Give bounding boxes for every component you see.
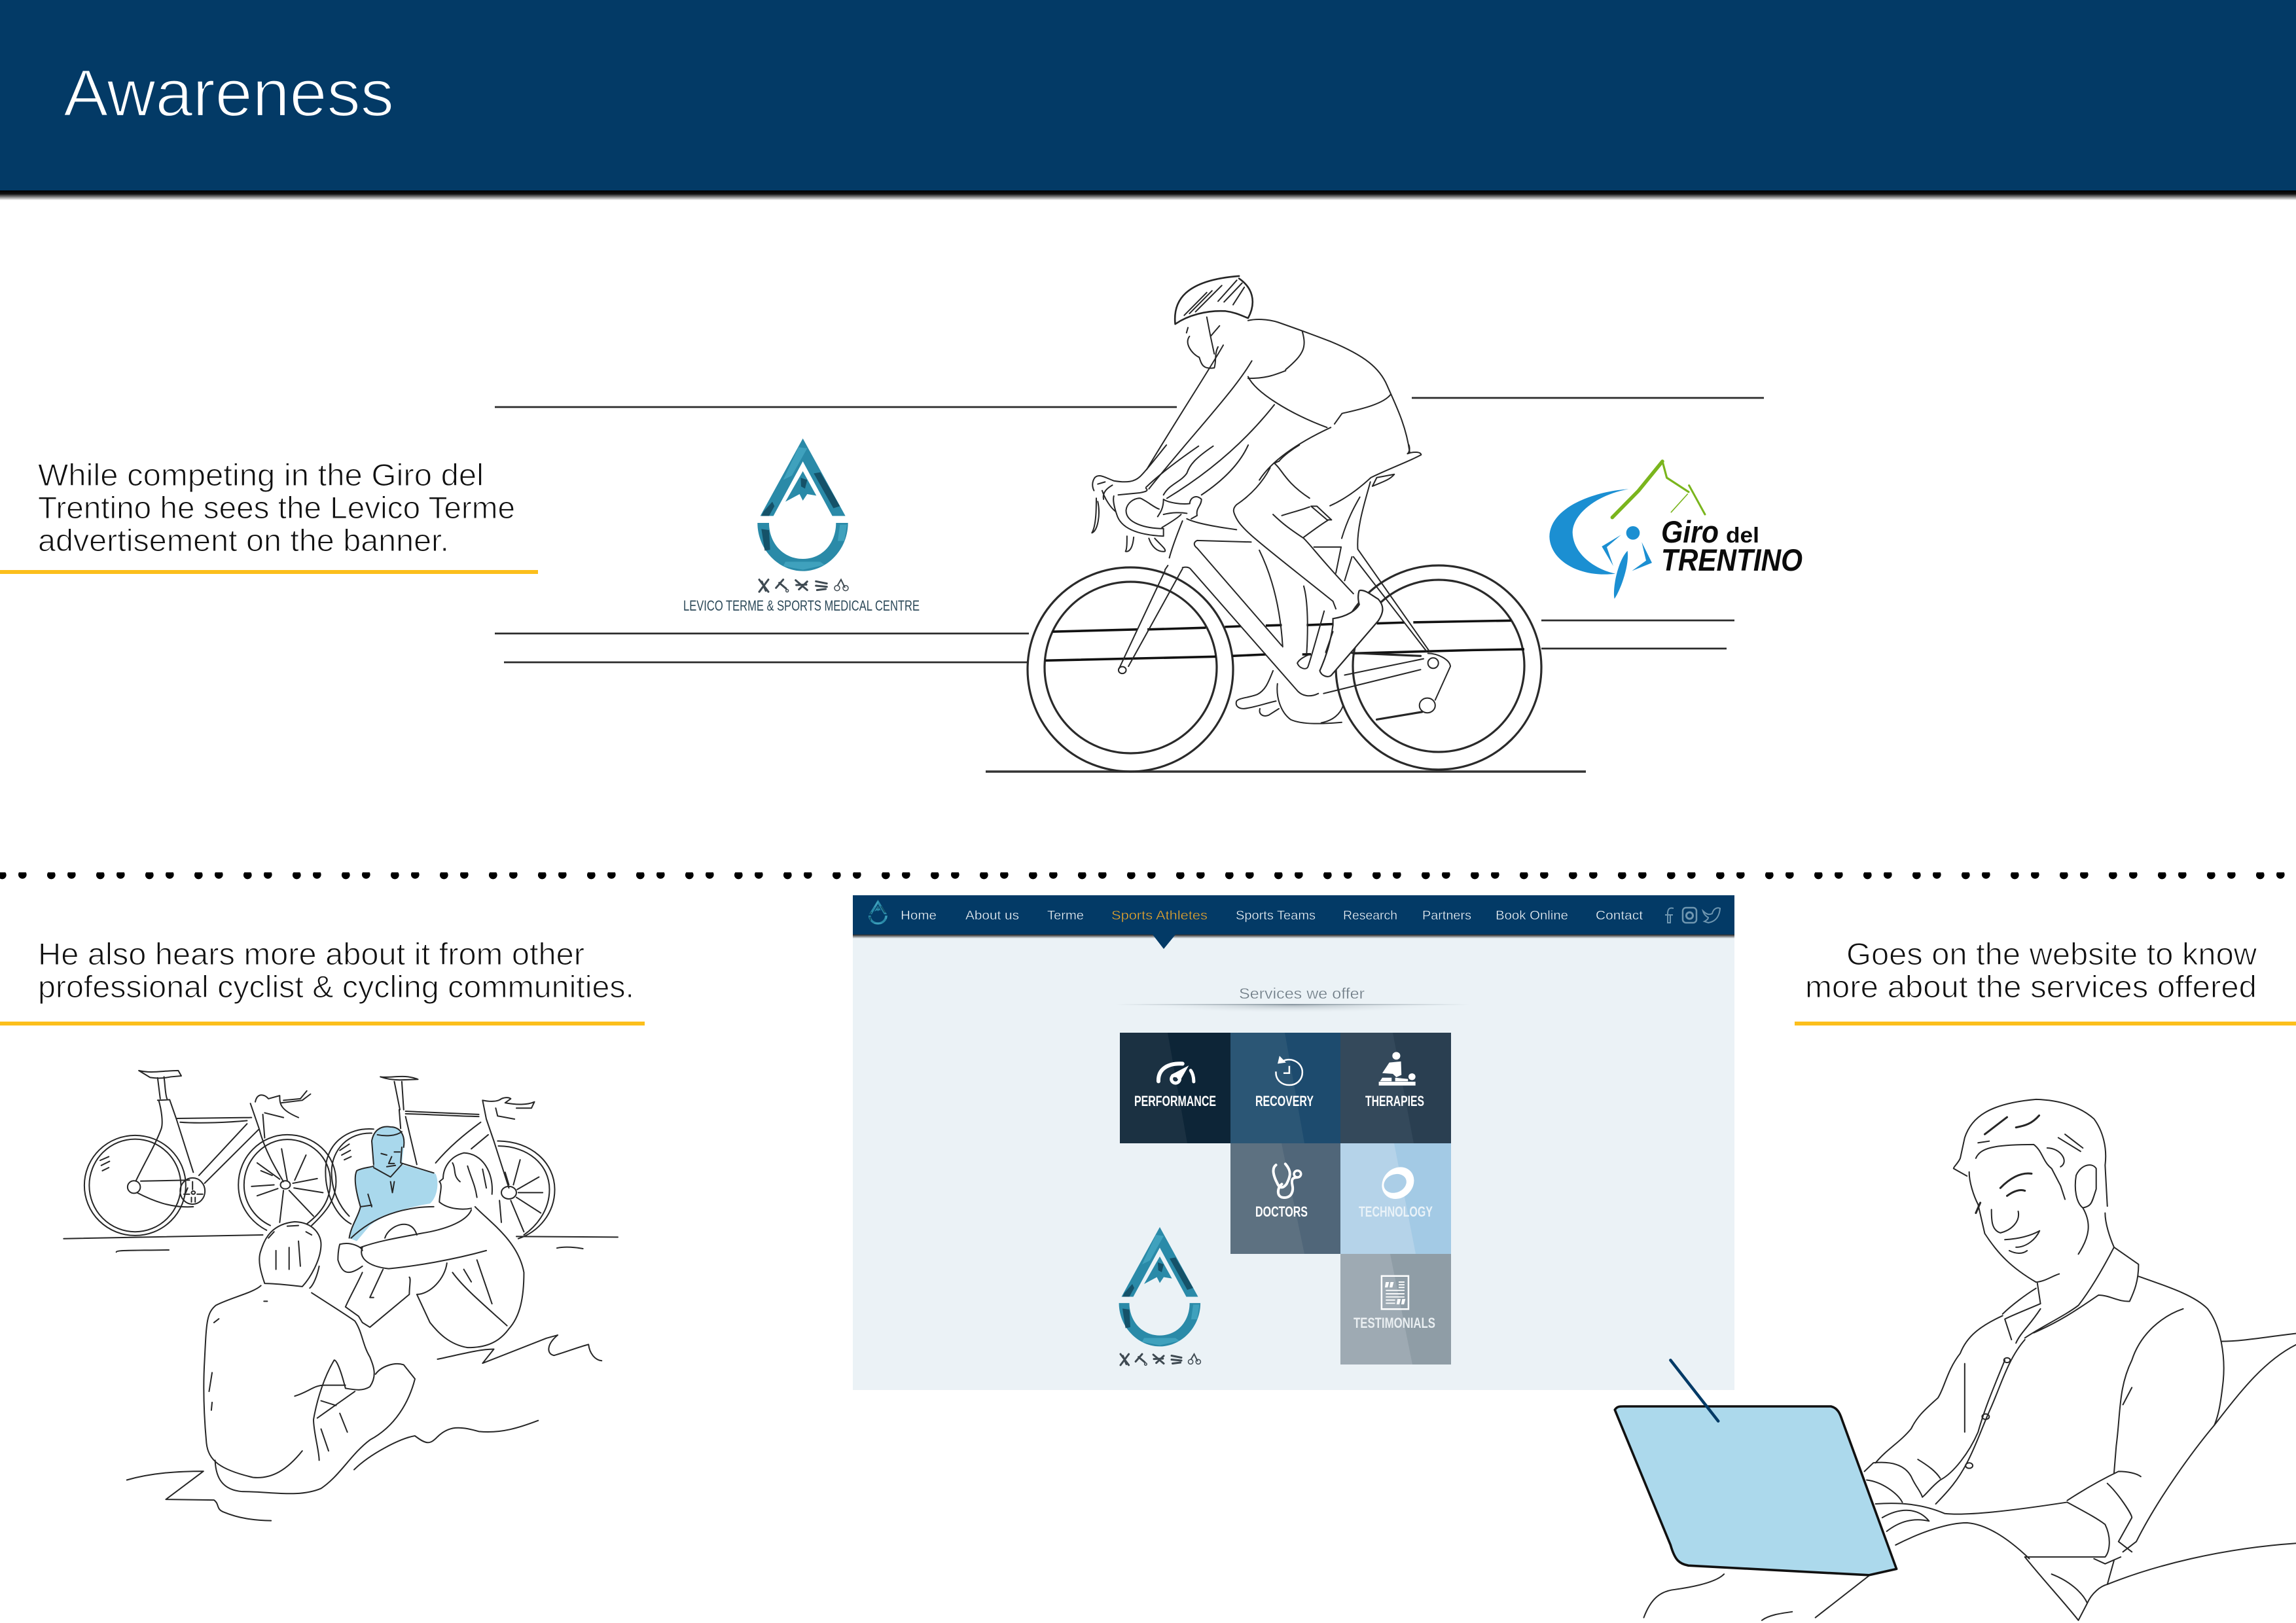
shirt: [2003, 1247, 2138, 1343]
tile: technology: [1340, 1143, 1451, 1254]
navigation bar: Terme: [1047, 908, 1084, 923]
tile: performance: [1120, 1033, 1230, 1143]
person in blue: [350, 1127, 437, 1241]
navigation bar: Research: [1343, 908, 1397, 923]
logo: Giro del Trentino: Giro: [1661, 514, 1719, 549]
wheels: [1028, 565, 1541, 772]
navigation bar: About us: [965, 908, 1019, 923]
text block: community caption: He also hears more about it from other: [38, 936, 584, 971]
laptop: [1615, 1406, 1897, 1575]
header band: [0, 0, 2296, 200]
services heading: Services we offer: [1239, 985, 1365, 1002]
navigation bar: [853, 895, 1734, 949]
blue person lines: [350, 1127, 434, 1238]
logo on website: [1119, 1227, 1200, 1365]
text block: banner caption: advertisement on the banner.: [38, 523, 449, 558]
tile: doctors: [1230, 1143, 1340, 1254]
text block: banner caption: While competing in the Giro del: [38, 457, 484, 492]
foot on pedal: [1319, 590, 1382, 677]
navigation bar: Partners: [1422, 908, 1471, 923]
title: Awareness: [63, 57, 394, 130]
navigation bar: Sports Teams: [1236, 908, 1316, 923]
tile: testimonials: TESTIMONIALS: [1354, 1315, 1435, 1331]
torso, bedding and pillow: [1644, 1334, 2296, 1620]
pointer line: [1670, 1360, 1718, 1421]
text block: community caption: [0, 936, 645, 1026]
tile: technology: TECHNOLOGY: [1359, 1204, 1433, 1220]
text block: website caption: Goes on the website to know: [1846, 936, 2257, 971]
navigation bar: Contact: [1596, 908, 1643, 923]
tile: therapies: [1340, 1033, 1451, 1143]
services heading: [1115, 985, 1469, 1021]
logo: Giro del Trentino: del: [1726, 523, 1759, 547]
tile: recovery: RECOVERY: [1255, 1093, 1314, 1109]
text block: website caption: more about the services offered: [1805, 969, 2257, 1004]
logo: Levico Terme: [683, 438, 920, 614]
tile: performance: PERFORMANCE: [1134, 1093, 1216, 1109]
navigation bar: Home: [901, 908, 937, 923]
logo: Giro del Trentino: TRENTINO: [1661, 543, 1803, 577]
head: [1954, 1099, 2108, 1282]
banner lines: [495, 398, 1764, 772]
arms and hands: [1865, 1459, 2141, 1564]
navigation bar: Book Online: [1496, 908, 1568, 923]
left bike: [136, 1071, 310, 1183]
text block: community caption: professional cyclist & cycling communities.: [38, 969, 634, 1004]
dotted divider: [0, 872, 2285, 880]
lower body and bike frame: [1045, 445, 1524, 724]
text block: banner caption: Trentino he sees the Levico Terme: [38, 490, 515, 525]
text block: website caption: [1795, 936, 2296, 1026]
text block: banner caption: [0, 457, 538, 574]
navigation bar: Sports Athletes: [1111, 908, 1208, 923]
tile: testimonials: [1340, 1254, 1451, 1364]
illustration: man with laptop: [1615, 1099, 2296, 1620]
logo: Levico Terme: LEVICO TERME & SPORTS MEDICAL CENTRE: [683, 597, 920, 614]
website mockup: [853, 895, 1734, 1390]
tile: doctors: DOCTORS: [1255, 1204, 1308, 1220]
right bike: [380, 1077, 535, 1188]
tile: therapies: THERAPIES: [1365, 1093, 1424, 1109]
seated man from behind: [259, 1222, 321, 1287]
illustration: banner lines and cyclist: [495, 276, 1764, 772]
ground strokes: [127, 1335, 601, 1521]
illustration: cyclists talking with bikes: [63, 1071, 618, 1521]
upper body of cyclist: [1147, 276, 1410, 498]
tile: recovery: [1230, 1033, 1340, 1143]
logo: Giro del Trentino: [1549, 461, 1803, 599]
social icons: [1665, 908, 1720, 923]
seated woman: [439, 1153, 492, 1209]
